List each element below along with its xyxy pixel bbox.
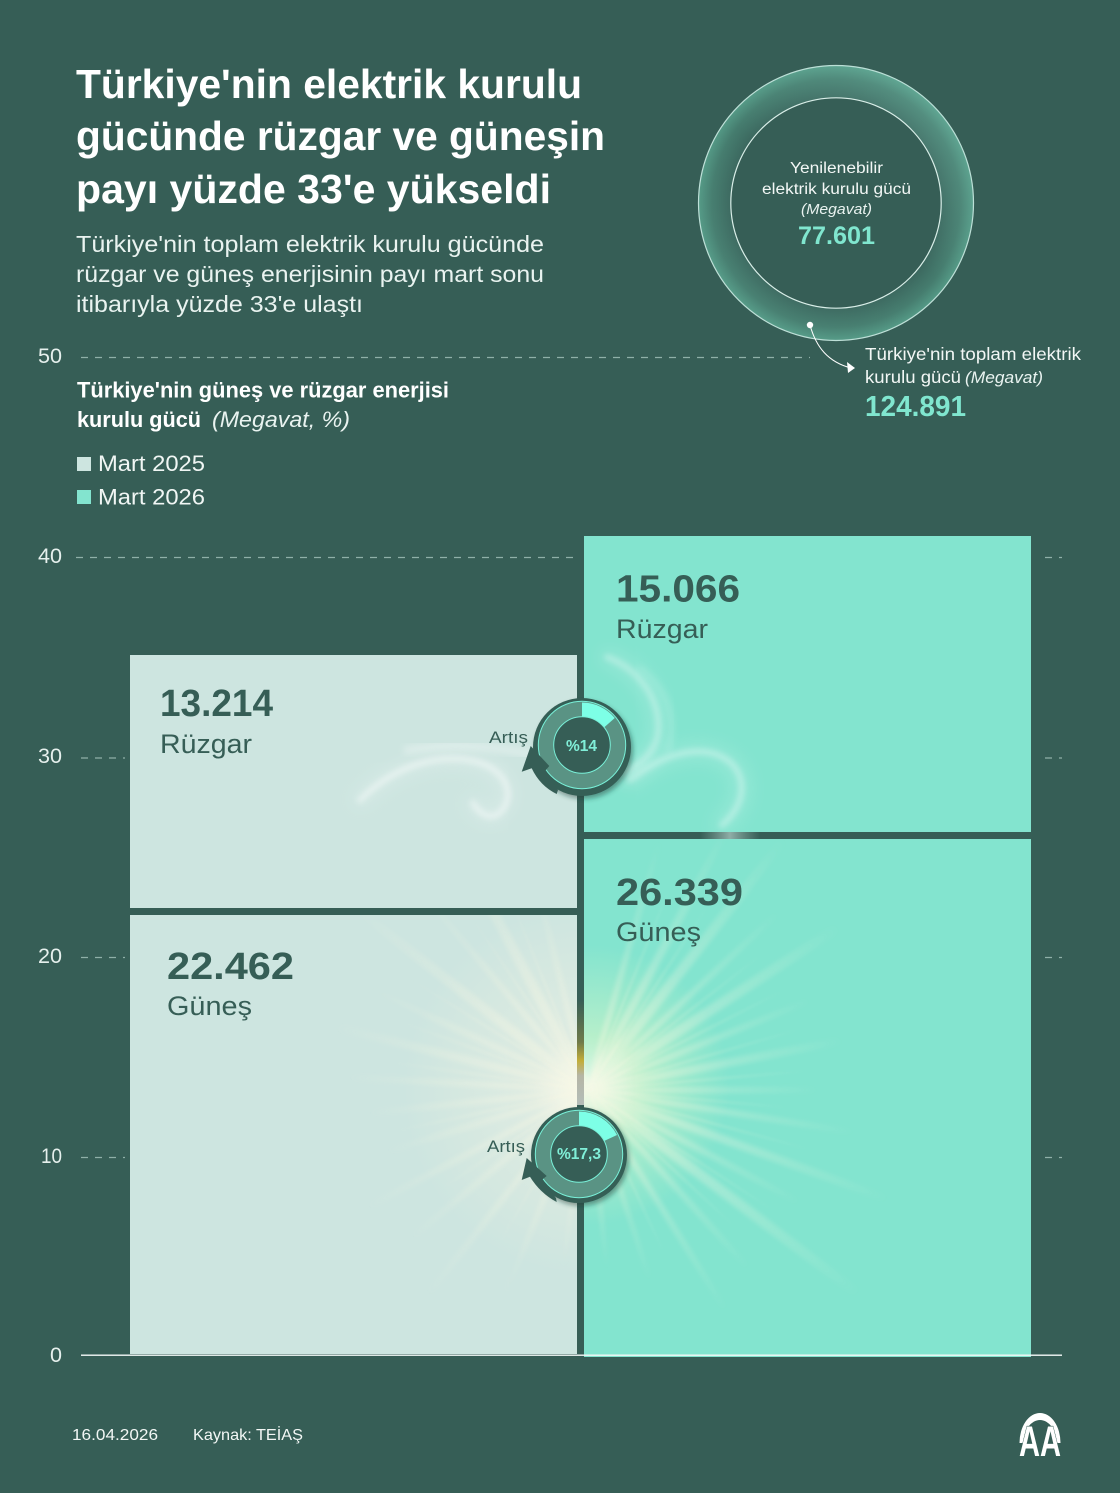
renewable capacity circle: (Megavat) (801, 202, 872, 218)
legend: Mart 2025 (98, 451, 205, 476)
renewable capacity circle: elektrik kurulu gücü (762, 181, 911, 198)
donut: solar increase: %17,3 (557, 1146, 601, 1163)
logo: AA: AA (1019, 1418, 1061, 1466)
bar: solar March 2025 (130, 915, 577, 1354)
label: wind 2025: Rüzgar (160, 729, 252, 759)
axis baseline (81, 1354, 1062, 1356)
label: wind 2026 (616, 568, 740, 644)
legend: Mart 2026 (98, 484, 205, 510)
title: Türkiye'nin elektrik kurulu (76, 61, 582, 107)
chart heading: Türkiye'nin güneş ve rüzgar enerjisi (77, 378, 449, 402)
footer date: 16.04.2026 (72, 1427, 158, 1444)
sun burst illustration (419, 868, 841, 1272)
y axis labels: 50 (38, 345, 62, 368)
donut: solar increase (522, 1107, 627, 1203)
label: solar 2026: Güneş (616, 917, 701, 947)
label: wind 2026: 15.066 (616, 568, 740, 610)
label: wind 2026: Rüzgar (616, 614, 708, 644)
total capacity pointer (807, 322, 855, 373)
chart heading: kurulu gücü (77, 407, 201, 432)
bar: solar March 2026 (584, 839, 1031, 1357)
subtitle: itibarıyla yüzde 33'e ulaştı (76, 291, 363, 317)
y axis labels (38, 345, 62, 1367)
title: gücünde rüzgar ve güneşin (76, 113, 605, 159)
title: payı yüzde 33'e yükseldi (76, 166, 551, 212)
subtitle: rüzgar ve güneş enerjisinin payı mart sonu (76, 261, 544, 287)
donut: wind increase (522, 698, 631, 796)
total capacity label: kurulu gücü (865, 367, 961, 387)
subtitle: Türkiye'nin toplam elektrik kurulu gücünde (76, 231, 544, 257)
y axis labels: 20 (38, 945, 62, 968)
renewable capacity circle: Yenilenebilir (790, 160, 883, 177)
label: solar increase: Artış (487, 1137, 525, 1156)
label: wind 2025 (160, 683, 273, 759)
bar: wind March 2026 (584, 536, 1031, 832)
legend (77, 451, 205, 510)
label: solar 2025: Güneş (167, 991, 252, 1021)
sun tint on gap (577, 1000, 584, 1105)
label: solar 2026: 26.339 (616, 872, 743, 914)
total capacity label: 124.891 (865, 391, 966, 423)
label: solar 2025 (167, 946, 294, 1021)
wind swirl illustration (360, 657, 742, 825)
y axis labels: 40 (38, 545, 62, 568)
title (76, 61, 605, 212)
y axis labels: 10 (41, 1145, 62, 1168)
label: wind increase: Artış (489, 728, 528, 747)
chart heading: (Megavat, %) (212, 407, 350, 432)
y axis labels: 0 (50, 1344, 62, 1367)
footer source: Kaynak: TEİAŞ (193, 1425, 303, 1444)
logo: AA (1019, 1413, 1061, 1466)
subtitle (76, 231, 544, 317)
label: solar 2026 (616, 872, 743, 947)
donut: wind increase: %14 (566, 738, 597, 755)
wind glow on gap (700, 832, 760, 839)
total capacity label: (Megavat) (965, 369, 1043, 387)
renewable capacity circle (698, 66, 974, 340)
renewable capacity circle: 77.601 (798, 222, 875, 250)
y axis labels: 30 (38, 745, 62, 768)
total capacity label (865, 344, 1081, 423)
chart heading (77, 378, 449, 432)
total capacity label: Türkiye'nin toplam elektrik (865, 344, 1081, 364)
bar: wind March 2025 (130, 655, 577, 908)
label: wind 2025: 13.214 (160, 683, 273, 725)
label: solar 2025: 22.462 (167, 946, 294, 988)
